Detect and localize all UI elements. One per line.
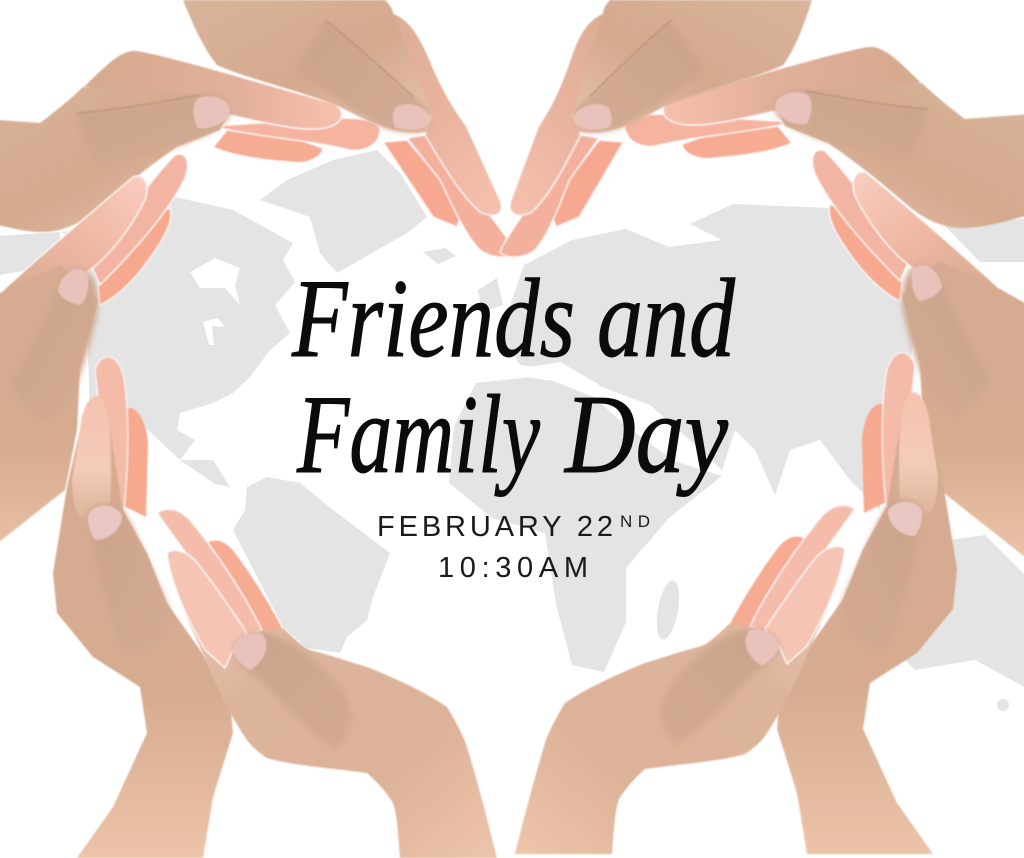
map: Africa: [449, 376, 722, 672]
map: British Isles: [478, 278, 503, 312]
title: [291, 257, 736, 497]
map: Hudson Bay: [190, 258, 240, 305]
map: Madagascar: [653, 579, 683, 641]
hand: upper left: [0, 50, 380, 232]
hand: bottom right: [515, 505, 855, 854]
date suffix: ND: [620, 512, 650, 531]
title word: Family: Family: [296, 373, 540, 497]
hand: bottom left: [157, 509, 497, 858]
map: Greenland: [260, 150, 427, 273]
hand: right side: [812, 150, 1024, 561]
map: North America: [60, 197, 295, 487]
map: Australia and islands: [895, 535, 1024, 690]
title word: Day: Day: [563, 373, 728, 497]
map: South America: [233, 477, 390, 653]
map: Great Lakes: [203, 318, 225, 345]
time: 10:30AM: [438, 552, 588, 584]
map: Eurasia: [500, 204, 915, 510]
hand: upper right: [625, 46, 1024, 228]
map: New Zealand: [997, 699, 1009, 711]
hand: lower left: [53, 357, 233, 858]
world map: [0, 150, 1024, 711]
hand: left side: [0, 154, 188, 565]
hand: top left of heart point: [183, 0, 515, 257]
title word: and: and: [597, 257, 736, 381]
map: land masses: [0, 150, 1024, 711]
date: FEBRUARY 22: [377, 511, 613, 543]
date and time: [377, 511, 650, 584]
map: Hudson Bay and lakes: [190, 258, 600, 385]
hand: lower right: [777, 353, 957, 854]
title word: Friends: Friends: [291, 257, 575, 381]
map: Alaska strip: [0, 232, 60, 276]
hand: top right of heart point: [480, 0, 833, 257]
map: Iceland: [423, 248, 456, 264]
map: Russia far east: [945, 218, 1024, 262]
map: Mediterranean: [500, 362, 600, 385]
